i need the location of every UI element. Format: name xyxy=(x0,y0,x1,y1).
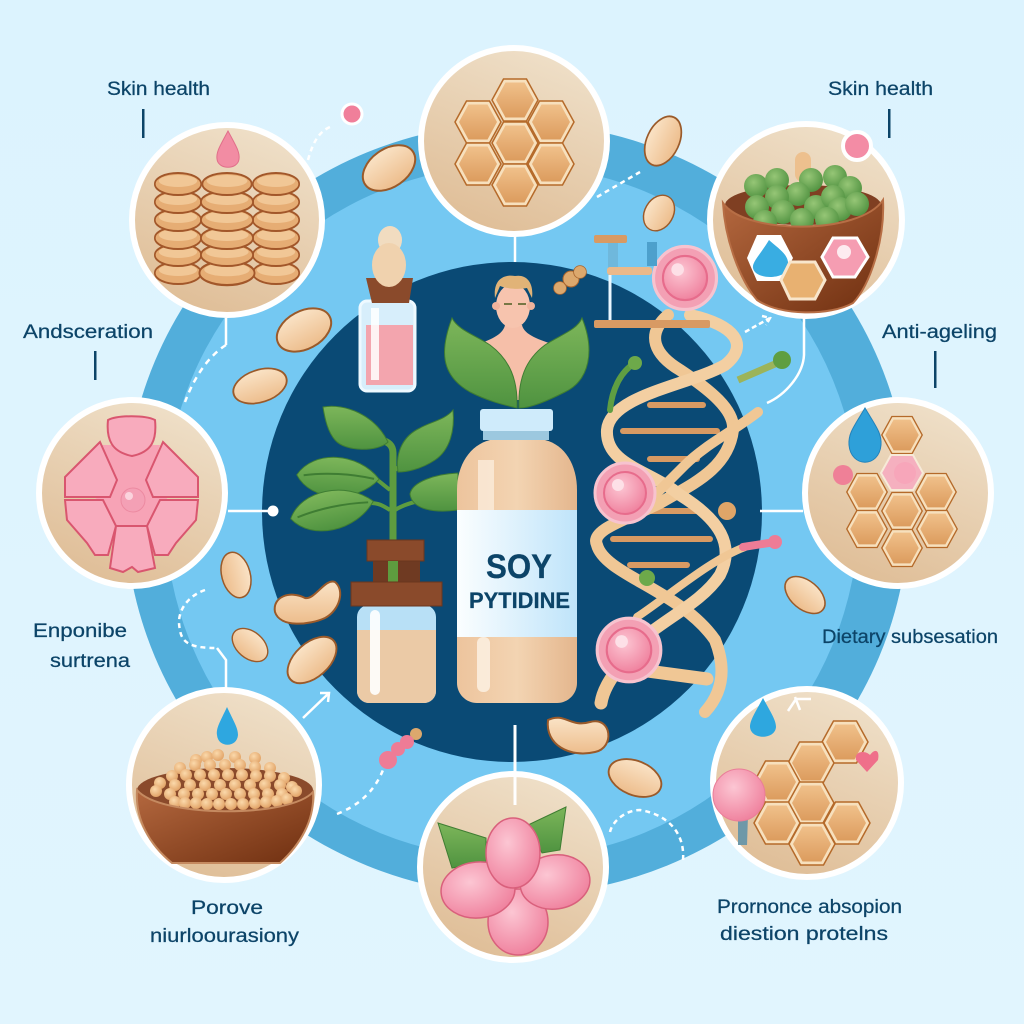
label: promotes absorption: diestion protelns xyxy=(720,924,888,945)
panel: bowl of soy xyxy=(129,690,319,880)
pink molecules xyxy=(342,104,422,769)
bottle label text: PYTIDINE xyxy=(469,588,570,613)
panel: honeycomb with lollipop xyxy=(713,689,901,877)
label: enponibe surtrena: surtrena xyxy=(50,651,130,672)
label: skin health right: Skin health xyxy=(828,79,933,100)
label: andsceration: Andsceration xyxy=(23,322,153,343)
label: skin health left: Skin health xyxy=(107,79,210,100)
DNA helix xyxy=(596,315,758,712)
central dark circle xyxy=(262,262,762,762)
label: dietary subsesation: Dietary subsesation xyxy=(822,627,998,648)
label: enponibe surtrena xyxy=(33,621,130,672)
connector lines xyxy=(179,127,804,860)
figure with leaves xyxy=(445,276,589,408)
label: porove: niurloourasiony xyxy=(150,926,300,947)
potted plant xyxy=(287,406,458,582)
panel connector: bottom xyxy=(514,725,516,805)
bottle label text xyxy=(469,548,570,613)
panel: honeycomb with droplet xyxy=(805,400,991,586)
panel: pink flower xyxy=(420,774,606,960)
label: skin health left xyxy=(107,79,210,138)
label: promotes absorption: Prornonce absopion xyxy=(717,897,902,918)
panel: honeycomb top xyxy=(421,48,607,234)
bottle xyxy=(457,409,577,703)
label: enponibe surtrena: Enponibe xyxy=(33,621,127,642)
DNA accents xyxy=(595,246,791,682)
milk jar xyxy=(351,582,442,703)
floating soybeans xyxy=(216,111,832,804)
junction dot xyxy=(268,506,278,516)
label: porove: Porove xyxy=(191,898,263,919)
label: skin health right xyxy=(828,79,933,138)
dropper vial xyxy=(360,226,415,391)
panel: bowl of peas xyxy=(710,124,902,316)
label: promotes absorption xyxy=(717,897,902,945)
label: andsceration xyxy=(23,322,153,380)
bottle label text: SOY xyxy=(486,548,552,586)
label: anti-ageling: Anti-ageling xyxy=(882,322,997,343)
label: porove xyxy=(150,898,300,947)
small lab stand xyxy=(554,235,710,328)
outer ring xyxy=(125,123,909,895)
label: anti-ageling xyxy=(882,322,997,388)
panel: stacked beans xyxy=(132,125,322,315)
panel: pink organ xyxy=(39,400,225,586)
